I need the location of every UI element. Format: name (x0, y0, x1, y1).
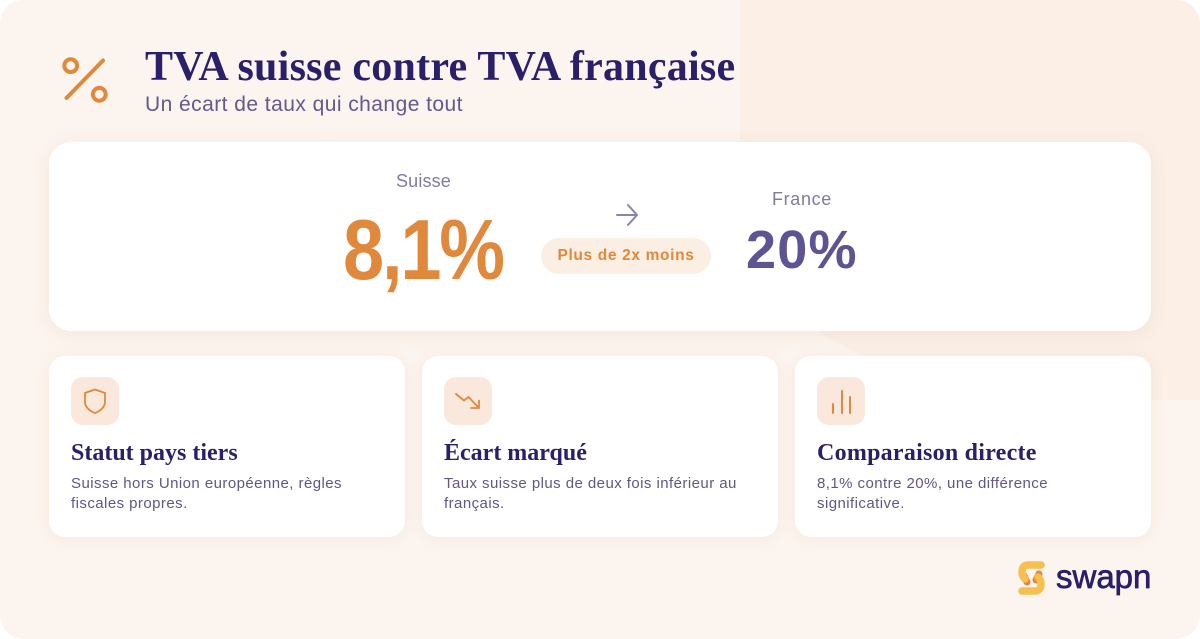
icon: shield (71, 377, 119, 425)
value: 8,1%: 8,1% (343, 203, 503, 298)
icon: percent (62, 57, 108, 103)
text: 8,1% contre 20%, une différence (817, 475, 1048, 492)
icon: trending down (444, 377, 492, 425)
logo mark (1018, 561, 1045, 595)
label: Suisse: Suisse (396, 171, 451, 191)
subtitle: Un écart de taux qui change tout (145, 93, 463, 116)
badge: Plus de 2x moins (541, 238, 711, 274)
icon: bar chart (817, 377, 865, 425)
card: Écart marqué (422, 356, 778, 537)
card: Statut pays tiers (49, 356, 405, 537)
text: significative. (817, 495, 905, 512)
text: Suisse hors Union européenne, règles (71, 475, 342, 492)
text: Taux suisse plus de deux fois inférieur au (444, 475, 737, 492)
logo: swapn (1018, 558, 1151, 596)
heading: Écart marqué (444, 440, 587, 466)
heading: Comparaison directe (817, 440, 1037, 466)
text (444, 475, 737, 512)
logo wordmark: swapn (1056, 558, 1151, 595)
label: France: France (772, 189, 832, 209)
text (71, 475, 342, 512)
title: TVA suisse contre TVA française (145, 44, 735, 90)
value: 20%: 20% (746, 220, 858, 280)
card: Comparaison directe (795, 356, 1151, 537)
badge: Plus de 2x moins: Plus de 2x moins (557, 247, 695, 264)
panel: rate comparison (49, 142, 1151, 331)
text (817, 475, 1048, 512)
text: français. (444, 495, 505, 512)
icon: arrow (616, 204, 638, 226)
heading: Statut pays tiers (71, 440, 238, 466)
text: fiscales propres. (71, 495, 188, 512)
